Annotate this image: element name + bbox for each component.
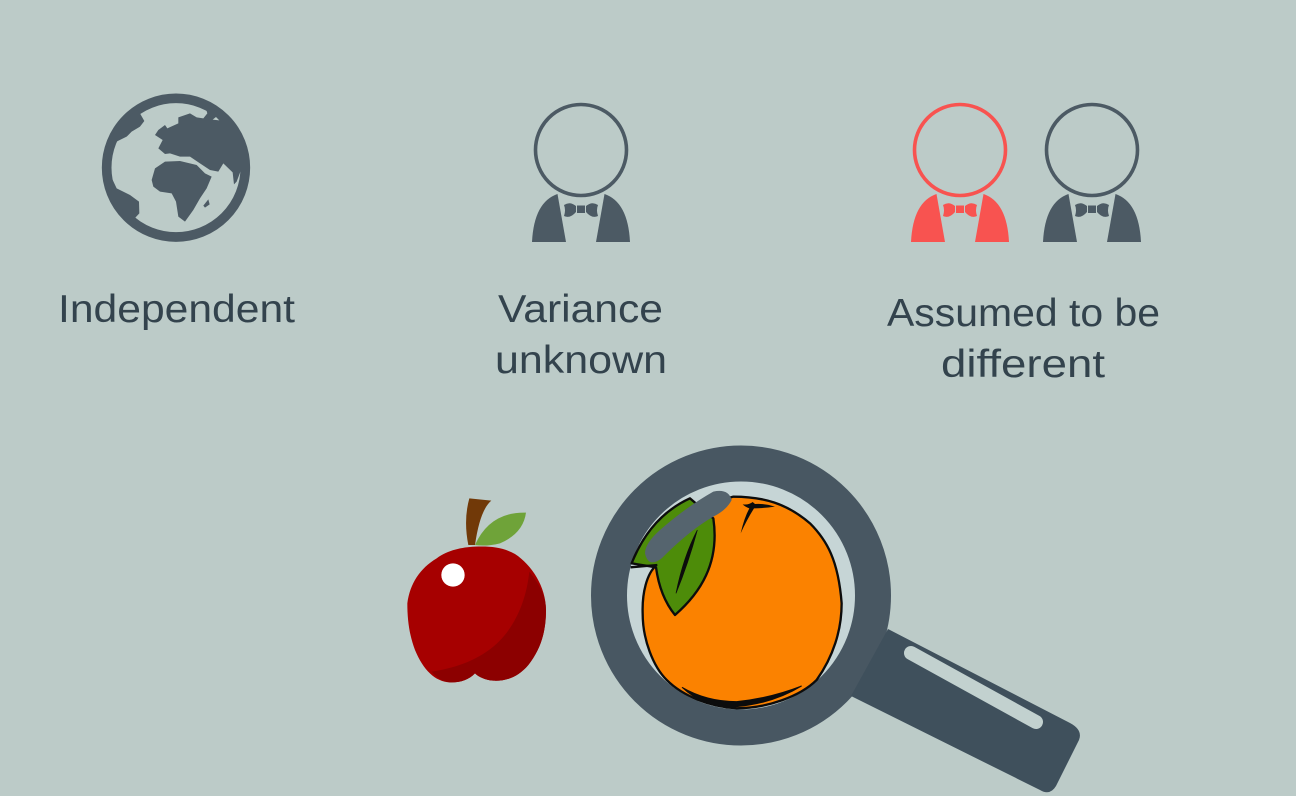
apple highlight: [441, 563, 465, 587]
icon: globe: [107, 98, 245, 237]
panel: assumed to be different: [887, 104, 1160, 386]
icon: magnifying glass over orange: [609, 464, 1080, 792]
icon: person with bow tie: [532, 104, 630, 242]
icon: red person with bow tie: [911, 104, 1009, 242]
apple stem: [466, 498, 491, 545]
label: Independent: Independent: [58, 288, 295, 331]
label: Variance unknown: Variance: [498, 288, 663, 331]
panel: independent: [58, 98, 295, 331]
grey smudge on leaf: [645, 491, 732, 562]
label: Assumed to be different: different: [941, 343, 1105, 386]
panel: variance unknown: [495, 104, 667, 382]
orange crown: [741, 502, 775, 533]
magnifier ring: [609, 464, 873, 728]
magnifier lens: [625, 480, 857, 712]
label: Assumed to be different: Assumed to be: [887, 292, 1160, 335]
orange body: [643, 497, 842, 708]
apple leaf: [475, 513, 526, 546]
label: Variance unknown: unknown: [495, 339, 667, 382]
icon: apple: [407, 498, 546, 682]
apple shadow: [432, 572, 546, 682]
icon: dark person with bow tie: [1043, 104, 1141, 242]
label: Assumed to be different: [887, 292, 1160, 386]
label: Variance unknown: [495, 288, 667, 382]
handle highlight: [911, 653, 1036, 722]
apple body: [407, 547, 546, 682]
orange fruit: [631, 491, 842, 708]
leaf vein: [676, 530, 697, 593]
orange bottom crease: [682, 686, 802, 707]
leaf stalk: [631, 565, 657, 567]
orange leaf: [632, 498, 715, 615]
magnifier handle: [851, 629, 1080, 792]
